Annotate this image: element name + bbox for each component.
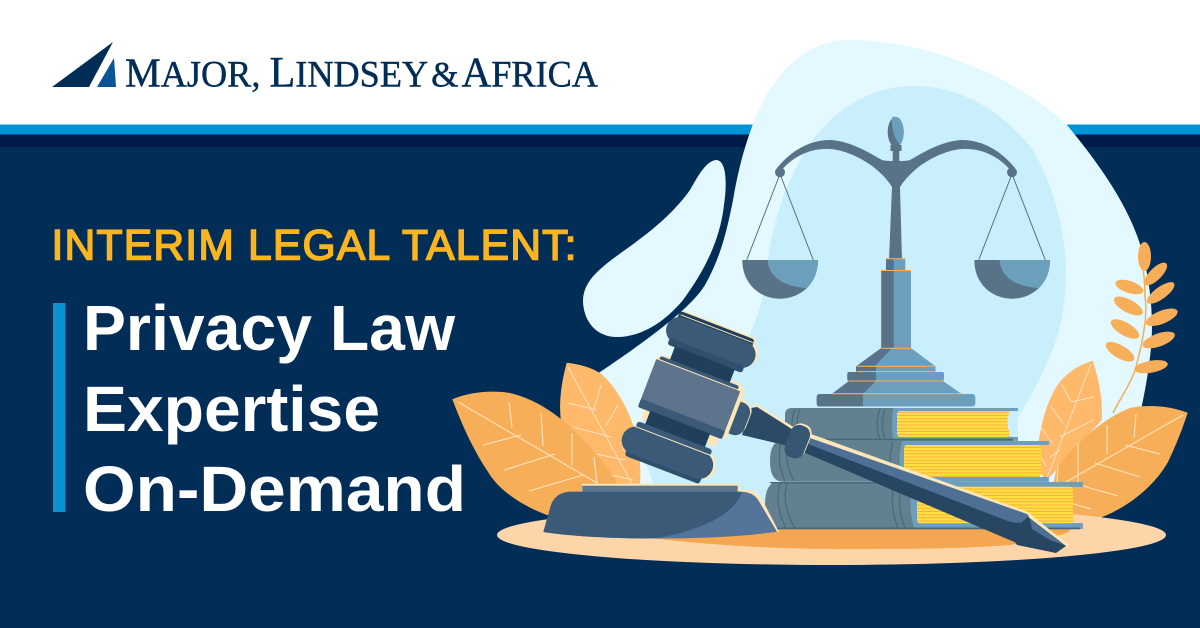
accent bar <box>53 303 66 512</box>
table ellipse <box>497 505 1166 565</box>
title <box>83 292 466 525</box>
logo wordmark: MAJOR, LINDSEY&AFRICA <box>125 50 598 97</box>
background blob: inner blue <box>633 86 1066 520</box>
left leaves <box>452 363 640 520</box>
branch leaflets <box>1103 242 1180 376</box>
book: middle <box>770 441 1049 482</box>
handle tip <box>1012 517 1066 553</box>
handle neck <box>742 407 795 446</box>
stack of books <box>765 408 1083 529</box>
book: top <box>785 408 1018 441</box>
leaf: left back <box>560 363 640 486</box>
handle cream edge <box>751 404 1069 549</box>
logo icon: sail mark <box>52 42 116 87</box>
scale right pan <box>974 260 1050 299</box>
gavel handle <box>720 397 1069 553</box>
gavel upper cap <box>655 308 761 392</box>
scales of justice <box>742 117 1050 407</box>
background blob: light large <box>560 40 1152 530</box>
leaf: right back <box>1037 361 1102 480</box>
leaf: left front <box>452 392 620 520</box>
scale left pan <box>742 260 818 299</box>
title line 3: On-Demand <box>83 453 466 525</box>
table shadow <box>650 526 1070 549</box>
gavel lower cap <box>616 405 724 487</box>
header: blue stripe <box>0 124 1200 134</box>
gavel head cream outline <box>621 307 765 484</box>
right leaves and branch <box>1037 242 1188 520</box>
leaf: right front <box>1050 406 1188 520</box>
scale finial <box>888 117 904 147</box>
branch stem <box>1113 268 1146 413</box>
heading: interim legal talent: INTERIM LEGAL TALENT: <box>52 222 576 270</box>
handle shaft <box>803 438 1032 543</box>
title line 2: Expertise <box>83 373 380 445</box>
book: bottom <box>765 482 1083 529</box>
header: dark navy stripe <box>0 134 1200 147</box>
header: white band <box>0 0 1200 124</box>
title line 1: Privacy Law <box>83 292 455 364</box>
scale column <box>817 259 975 406</box>
scale beam and stem <box>775 140 1017 260</box>
background blob: light small <box>583 160 726 337</box>
scale strings <box>747 174 1045 260</box>
gavel body <box>638 355 742 439</box>
handle collars <box>720 397 814 461</box>
gavel sound block <box>543 484 779 538</box>
gavel head <box>616 306 765 488</box>
logo <box>52 42 598 97</box>
